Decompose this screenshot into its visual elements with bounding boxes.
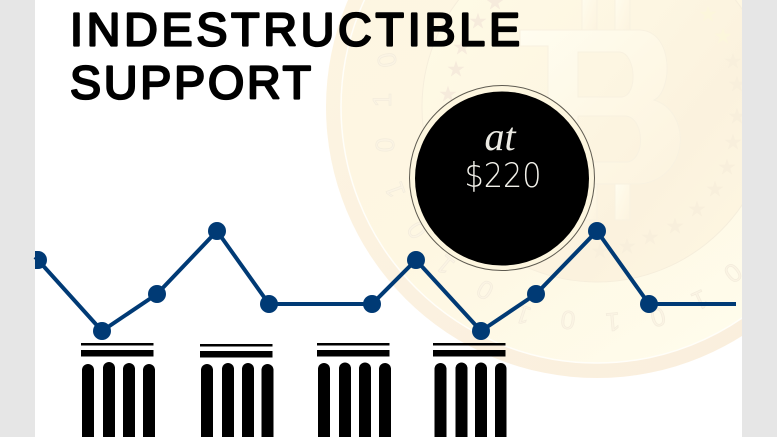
coin binary digits: 0	[471, 273, 499, 307]
coin stars: ★	[446, 58, 466, 82]
pillar 3	[317, 343, 391, 437]
coin stars: ★	[687, 198, 707, 222]
pillar 4	[433, 343, 506, 437]
coin stars: ★	[438, 82, 458, 108]
coin stars: ★	[727, 72, 747, 98]
coin binary digits: 0	[370, 138, 400, 152]
coin binary digits	[367, 50, 748, 338]
coin binary digits: 1	[511, 298, 535, 332]
pillar 2	[200, 344, 274, 437]
coin binary digits: 1	[604, 306, 622, 338]
badge word: at: at	[484, 114, 516, 159]
bitcoin B symbol	[520, 0, 628, 216]
coin binary digits: 0	[371, 50, 403, 70]
title	[70, 4, 520, 108]
coin stars: ★	[717, 156, 737, 180]
title line 1: INDESTRUCTIBLE	[70, 4, 520, 56]
coin stars: ★	[698, 2, 718, 28]
coin binary digits: 1	[687, 283, 713, 317]
coin binary digits: 0	[718, 257, 748, 289]
coin stars	[440, 0, 502, 101]
coin stars: ★	[723, 50, 743, 74]
badge price: $220	[464, 156, 542, 196]
coin stars: ★	[665, 214, 685, 240]
coin stars: ★	[640, 226, 660, 250]
bitcoin coin background	[326, 0, 777, 378]
coin stars: ★	[468, 10, 488, 34]
title line 2: SUPPORT	[70, 56, 311, 108]
coin binary digits: 1	[367, 93, 397, 107]
pillar 1	[81, 343, 155, 437]
coin binary digits: 0	[559, 304, 577, 336]
coin stars: ★	[617, 234, 637, 260]
price badge	[410, 86, 594, 270]
coin stars: ★	[723, 130, 743, 156]
coin binary digits: 1	[378, 178, 412, 202]
line chart	[35, 222, 736, 340]
coin binary digits: 0	[401, 215, 433, 245]
coin binary digits: 0	[647, 301, 669, 333]
coin stars: ★	[452, 36, 472, 60]
coin stars: ★	[713, 24, 733, 50]
coin stars: ★	[727, 104, 747, 130]
coin stars: ★	[705, 178, 725, 202]
coin binary digits: 1	[430, 249, 460, 281]
coin stars: ★	[590, 240, 610, 264]
